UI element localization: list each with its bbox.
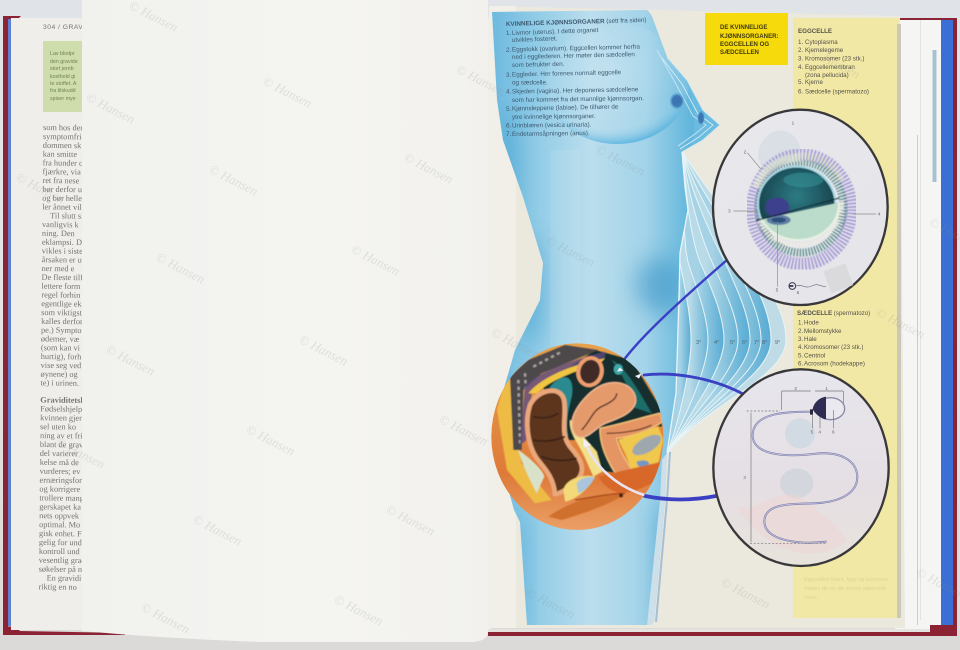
watermarks: © Hansen [154,249,208,287]
overlay text: organ list: 6. [506,122,512,130]
sperm cell legend: 3. [798,336,803,343]
egg cell legend [798,28,869,96]
stage labels: 8° [762,340,767,346]
stage labels: 6° [742,340,747,346]
stage labels: 5° [730,340,735,346]
egg cell legend: 3. [798,56,803,62]
left page body text: regel forhin [41,290,81,300]
watermarks: © Hansen [297,331,351,369]
anatomy cross-section circle [491,343,664,530]
sperm head [810,397,845,420]
stage labels: 7° [754,340,759,346]
left page body text: sel uten ko [40,422,76,432]
egg cell circle: 6 [797,290,800,295]
left page body text [38,123,91,592]
yellow title label: SÆDCELLEN [720,49,759,56]
translucent overlay sheet [82,0,488,642]
watermarks: © Hansen [594,141,648,179]
green info box [43,41,85,112]
overlay text: organ list: utvikles fosteret. [512,35,558,44]
left page body text: søkelser på n [39,565,83,574]
watermarks: © Hansen [809,44,863,82]
egg cell legend: Eggcellemembran [805,64,855,71]
left page body text: gelig for und [39,538,83,547]
watermarks: © Hansen [207,161,261,199]
sperm cell circle: 3 [743,475,746,480]
left page body text: vikles i siste [42,246,83,256]
left page body text: ødemer, væ [41,334,80,344]
right page edges [488,18,957,636]
sperm cell legend [797,310,870,368]
sperm cell legend: 5. [798,352,803,360]
egg cell legend: Kromosomer (23 stk.) [805,56,864,62]
book cover: left edge [3,16,125,635]
green info box: den gravide [50,59,78,65]
stage labels [696,340,780,346]
left page body text: som viktigst [41,308,83,317]
stage labels: 3° [696,340,701,346]
left page body text: De fleste tilf [41,273,83,282]
overlay text: organ list: 5. [506,106,512,113]
egg cell legend: Sædcelle (spermatozo) [805,88,869,96]
sperm cell circle: 1 [825,386,828,391]
left page body text: egentlige ekl [41,299,85,309]
left page body text: Graviditetsk [40,395,85,405]
left page body text: nets oppvek [39,511,80,521]
bladder [600,413,662,473]
sperm tail [753,412,857,543]
dimension lines [747,391,843,543]
bowel loop [575,355,605,388]
watermarks: © Hansen [104,341,158,379]
right page sheet [489,6,905,628]
sperm cell legend: 2. [798,328,803,335]
watermarks: © Hansen [84,89,138,127]
left page body text: Til slutt sl [50,211,84,221]
overlay text: organ list: 2. [506,47,512,54]
sperm cell legend: Kromosomer (23 stk.) [804,344,863,351]
skin folds [598,462,662,493]
overlay text: organ list: 4. [506,88,512,96]
egg cell legend: 2. [798,47,803,54]
egg cell circle: 5 [776,288,779,293]
left page body text: te) i urinen. [40,378,79,388]
left page body text: Fødselshjelp [40,404,82,414]
egg cell legend: EGGCELLE [798,28,832,35]
sperm cell legend: Mellomstykke [804,328,842,335]
left page body text: trollere mang [39,493,84,503]
sperm cell circle: 5 [811,429,814,434]
white arrow [583,367,644,495]
egg cell circle: 1 [792,120,795,125]
sperm cell circle: 6 [832,429,835,434]
egg cell circle: 2 [744,149,747,154]
vaginal wall [570,420,602,477]
watermarks: © Hansen [524,584,578,622]
left page body text: vanligvis k [42,220,80,229]
left page body text: ret fra nese [42,176,80,185]
green info box: fra tilskudd [50,88,76,94]
yellow title label: EGGCELLEN OG [720,41,769,48]
watermarks: © Hansen [489,324,543,362]
overlay text: organ list: Skjeden (vagina). Her deponeres sædcellene [512,86,639,95]
egg cell legend: (zona pellucida) [805,72,849,79]
watermarks: © Hansen [874,304,928,342]
left page body text: bør derfor u [42,185,82,194]
green info box: spiser mye [50,96,76,102]
overlay text: organ list: Eggstokk (ovarium). Eggcellen kommer herfra [512,44,641,53]
overlay text: organ list: som har kommet fra det mannlige kjønnsorgan. [512,95,644,104]
left page body text: ernæringsfor [40,476,82,485]
sperm cell legend: SÆDCELLE (spermatozo) [797,310,870,317]
overlay text: organ list: KVINNELIGE KJØNNSORGANER (sett fra siden) [506,17,647,28]
overlay text: organ list [506,17,647,138]
watermarks: © Hansen [349,241,403,279]
breast [560,33,688,144]
left page body text: gerskapet ka [39,502,81,512]
left page body text: del varierer [40,449,78,458]
egg cell legend: 4. [798,64,803,71]
left page body text: fjærkre, via [43,167,81,177]
egg cell legend: Kjernelegeme [805,47,844,54]
rectum [527,391,582,494]
left page body text: pe.) Sympto [41,326,82,335]
page header: 304 / GRAV [43,24,83,31]
left page body text: ning. Den [42,229,76,238]
left page body text: optimal. Mo [39,520,80,529]
sperm cell circle: 4 [818,429,821,434]
egg cell legend: 1. [798,39,803,46]
left page body text: vurderes; ev [40,467,81,476]
left page body text: (som kan vi [41,343,81,353]
watermarks: © Hansen [54,434,108,472]
left page body text: vesentlig grad [39,556,86,565]
stage labels: 4° [714,340,719,346]
overlay text: organ list: Endetarmsåpningen (anus). [512,129,590,138]
female torso silhouette [482,10,720,630]
watermarks: © Hansen [437,411,491,449]
egg cell circle: 3 [728,209,731,214]
small sperm [789,283,826,289]
overlay text: organ list: 1. [506,30,512,37]
overlay text: organ list: som befrukter den. [512,61,565,69]
watermarks: © Hansen [261,73,315,111]
sperm cell legend: 1. [798,320,803,326]
left page body text: fra hunder o [43,158,83,168]
left book page [11,18,491,630]
connector arrows: blue lines [623,260,745,499]
watermarks: © Hansen [139,599,193,637]
left page body text: hurtig), forh [41,352,82,361]
yellow title label [705,13,788,65]
egg cell circle [713,110,888,305]
overlay text: organ list: Kjønnsleppene (labiae). De tilhører de [512,104,619,112]
left page body text: gisk enhet. F [39,529,82,538]
green info box: Lav blodpr [50,51,75,57]
dark pelvic cavity [542,350,662,473]
overlay text: organ list: Eggleder. Her forenes normalt eggcelle [512,69,622,78]
overlay text: organ list: 3. [506,72,512,79]
watermarks: © Hansen [544,232,598,270]
sperm cell legend: 4. [798,344,803,351]
overlay text: organ list: ned i eggilederen. Her møter den sædcellen [512,51,635,61]
corona fringe [752,155,851,264]
left page body text: årsaken er u [42,255,82,265]
overlay text: organ list: Livmor (uterus). I dette organet [512,27,599,37]
left page body text: blant de grav [40,440,84,449]
sperm cell circle [713,369,889,566]
yellow side panel [793,18,901,618]
faint caption on yellow panel: Eggcellen blant, ligg og sammen [804,577,888,583]
egg cell legend: Cytoplasma [805,39,838,46]
watermarks: © Hansen [384,501,438,539]
left page body text: lettere form [41,282,81,291]
green info box: kosthold gi [50,74,75,80]
watermarks: © Hansen [191,511,245,549]
sperm cell legend: Hode [804,320,819,326]
egg cell legend: 6. [798,88,803,96]
overlay text: organ list: 7. [506,131,512,138]
leader lines [733,153,876,287]
egg cell circle: 4 [878,211,881,216]
left page body text: riktig en no [38,582,77,592]
faint caption on yellow panel: møtes de av de sterke sædcelle [804,586,886,592]
watermarks: © Hansen [454,61,508,99]
sperm cell legend: Acrosom (hodekappe) [804,360,865,368]
watermarks: © Hansen [244,421,298,459]
left page body text: dommen sk [43,141,82,150]
watermarks: © Hansen [402,149,456,187]
left page body text: kontroll und [39,547,81,556]
left page body text: symptomfri [43,132,82,141]
nipples [669,92,685,110]
left page body text: kalles derfor [41,317,83,326]
wedges near anus [518,450,544,493]
left page body text: ner med e [42,264,75,273]
left page body text: og bør heller [42,194,85,203]
watermarks: © Hansen [332,591,386,629]
left page body text: og korrigere [39,484,81,494]
sperm cell legend: 6. [798,360,803,368]
left page body text: ler ånnet vilt [42,202,85,212]
left page body text: ning av et fri [40,431,83,441]
stage labels: 9° [775,340,780,346]
left page body text: kelse må de [40,458,79,467]
overlay text: organ list: ytre kvinnelige kjønnsorganer. [512,113,596,121]
green info box: stort jernb [50,66,74,72]
fat band [497,373,552,503]
overlay text: organ list: Urinblæren (vesica urinaria). [512,122,592,129]
sperm cell legend: Hale [804,336,817,343]
left page body text: øynene) og [41,370,78,379]
pregnancy stage layers [667,152,786,453]
left page body text: vise seg ved [41,361,82,370]
yellow title label: KJØNNSORGANER: [720,33,779,40]
left page body text: En gravidi [47,574,82,583]
overlay text: organ list: og sædcelle. [512,80,548,86]
green info box: te stoffet. A [50,81,77,87]
yellow title label: DE KVINNELIGE [720,24,767,31]
uterus [572,383,636,437]
left page body text: som hos den [43,123,85,132]
left page body text: kvinnen gjen [40,413,84,423]
sperm cell circle: 2 [794,386,797,391]
egg cell legend: Kjerne [805,79,823,86]
spine [510,345,598,450]
left page body text: kan smitte [43,150,77,159]
left page body text: eklampsi. D [42,238,82,247]
egg cell legend: 5. [798,79,803,86]
faint caption on yellow panel [804,577,888,601]
watermarks: © Hansen [719,574,773,612]
sperm cell legend: Centriol [804,352,825,360]
faint caption on yellow panel: vann. [804,595,819,601]
watermarks: © Hansen [14,169,68,207]
